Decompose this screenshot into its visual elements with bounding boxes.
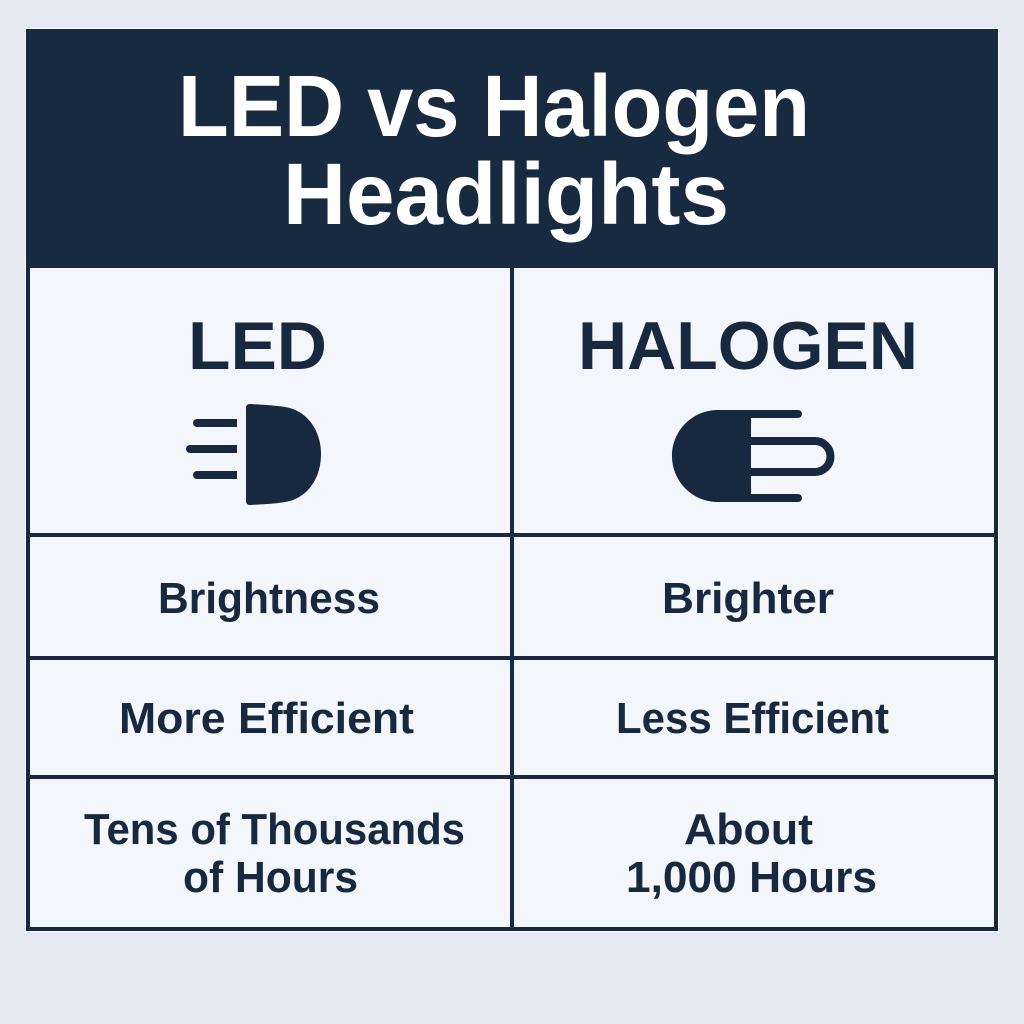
row 1: brightness (158, 574, 834, 623)
title: Headlights (283, 146, 729, 243)
row 2: efficiency (119, 694, 889, 743)
column heading: HALOGEN: HALOGEN (578, 308, 918, 384)
header band (27, 30, 997, 268)
row 3: lifespan: 1,000 Hours (626, 853, 877, 902)
row 3: lifespan (84, 805, 877, 902)
row 3: lifespan: of Hours (183, 853, 358, 902)
icon: halogen headlight (672, 410, 830, 502)
row 2: efficiency: Less Efficient (616, 694, 889, 743)
row 1: brightness: Brightness (158, 574, 380, 623)
row 2: efficiency: More Efficient (119, 694, 414, 743)
column heading: LED: LED (188, 308, 327, 384)
title: LED vs Halogen (178, 58, 810, 155)
row 3: lifespan: Tens of Thousands (84, 805, 465, 854)
icon: LED headlight (186, 404, 321, 505)
row 3: lifespan: About (684, 805, 813, 854)
row 1: brightness: Brighter (662, 574, 834, 623)
title (178, 58, 810, 243)
